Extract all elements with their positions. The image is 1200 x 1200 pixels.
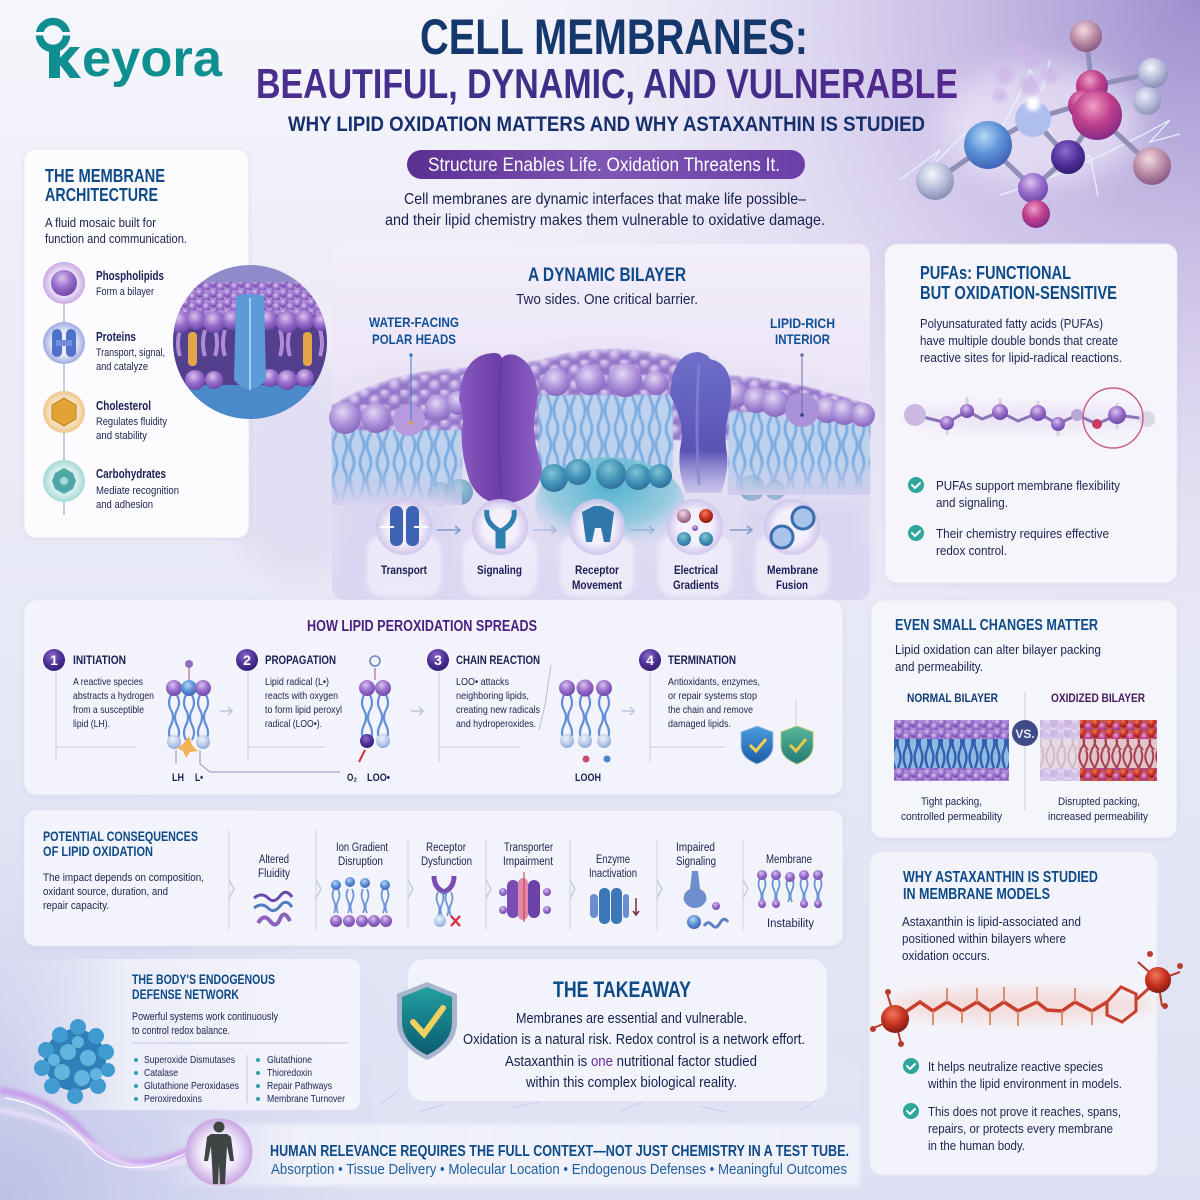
heading: consequences xyxy=(43,828,198,859)
icon: human figure in sphere xyxy=(186,1119,252,1185)
normal bilayer xyxy=(894,691,1009,823)
consequence: impaired signaling: Signaling xyxy=(676,856,716,868)
consequence: transporter impairment: Impairment xyxy=(503,856,554,868)
oxidized bilayer xyxy=(1040,691,1157,823)
description: The impact depends on composition, xyxy=(43,872,204,884)
inset: membrane close-up circle xyxy=(169,265,331,425)
description xyxy=(132,1011,278,1037)
description: repair capacity. xyxy=(43,900,109,912)
molecule illustration xyxy=(900,20,1180,228)
defense list: Thioredoxin xyxy=(267,1067,312,1079)
step 2: propagation xyxy=(236,649,342,730)
defense list: Catalase xyxy=(144,1067,178,1079)
defense list: Repair Pathways xyxy=(267,1080,332,1092)
defense list xyxy=(134,1054,345,1105)
takeaway text: Astaxanthin is one nutritional factor studied xyxy=(505,1053,757,1070)
step 4: termination: the chain and remove xyxy=(668,704,753,716)
defense list: Glutathione Peroxidases xyxy=(144,1080,239,1092)
defense list: Glutathione xyxy=(267,1054,312,1066)
function: receptor movement xyxy=(569,499,625,592)
callout: water-facing polar heads: POLAR HEADS xyxy=(372,331,456,347)
item: carbohydrates: Carbohydrates xyxy=(96,467,166,481)
heading: defense: THE BODY'S ENDOGENOUS xyxy=(132,971,275,987)
description xyxy=(902,914,1081,963)
consequence: impaired signaling xyxy=(676,842,728,929)
description: and permeability. xyxy=(895,659,983,674)
step 4: termination: TERMINATION xyxy=(668,653,736,667)
panel: endogenous defense network xyxy=(0,959,360,1110)
step 1: initiation: from a susceptible xyxy=(73,704,144,716)
VS badge: VS. xyxy=(1015,727,1035,741)
heading: membrane architecture xyxy=(45,166,165,205)
description: reactive sites for lipid-radical reactions. xyxy=(920,350,1122,365)
PUFA chain xyxy=(904,388,1155,448)
human relevance text xyxy=(270,1143,849,1178)
callout: water-facing polar heads: WATER-FACING xyxy=(369,314,459,330)
step 1: initiation xyxy=(43,649,154,730)
step 3: chain reaction xyxy=(427,649,540,730)
heading: membrane architecture: THE MEMBRANE xyxy=(45,166,165,186)
heading: PUFAs xyxy=(920,263,1117,303)
checklist: PUFAs support membrane flexibility xyxy=(936,478,1120,493)
step 3: chain reaction: and hydroperoxides. xyxy=(456,718,536,730)
checklist xyxy=(908,477,1120,558)
energy swirl xyxy=(0,1090,190,1168)
checklist: within the lipid environment in models. xyxy=(927,1076,1122,1091)
human relevance text: HUMAN RELEVANCE REQUIRES THE FULL CONTEXT—NOT JUST CHEMISTRY IN A TEST TUBE. xyxy=(270,1143,849,1160)
heading: defense xyxy=(132,971,275,1002)
function: transport: Transport xyxy=(381,563,427,577)
step 2: propagation: 2 xyxy=(243,652,251,668)
heading: takeaway: THE TAKEAWAY xyxy=(553,977,691,1002)
step 2: propagation: radical (LOO•). xyxy=(265,718,322,730)
item: carbohydrates: and adhesion xyxy=(96,499,153,511)
description xyxy=(43,872,204,912)
checklist: redox control. xyxy=(936,543,1007,558)
panel: membrane architecture xyxy=(24,149,249,538)
item: proteins: Proteins xyxy=(96,330,136,344)
human relevance text: Absorption • Tissue Delivery • Molecular Location • Endogenous Defenses • Meaningful Outcomes xyxy=(271,1161,847,1178)
function: electrical gradients: Gradients xyxy=(673,578,719,592)
heading: astaxanthin: IN MEMBRANE MODELS xyxy=(903,886,1050,903)
panel: how lipid peroxidation spreads xyxy=(24,600,843,795)
consequence: enzyme inactivation xyxy=(589,854,639,924)
membrane illustration xyxy=(329,336,875,590)
consequence: ion gradient disruption: Ion Gradient xyxy=(336,842,389,854)
heading: peroxidation: HOW LIPID PEROXIDATION SPREADS xyxy=(307,618,537,635)
flow arrows xyxy=(437,526,752,534)
arrow 2 xyxy=(411,707,423,715)
intro text: A fluid mosaic built for xyxy=(45,216,156,230)
description: to control redox balance. xyxy=(132,1025,230,1037)
consequence: enzyme inactivation: Inactivation xyxy=(589,868,637,880)
panel: potential consequences xyxy=(24,810,843,946)
icon: protein cluster xyxy=(34,1019,115,1104)
heading: membrane architecture: ARCHITECTURE xyxy=(45,185,158,205)
lipid diagram 3: LOOH xyxy=(575,772,601,784)
description: Lipid oxidation can alter bilayer packing xyxy=(895,642,1101,657)
function: signaling xyxy=(472,499,528,577)
logo: Keyora xyxy=(35,22,223,88)
consequence: receptor dysfunction: Receptor xyxy=(426,842,466,854)
item: proteins: Transport, signal, xyxy=(96,347,165,359)
step 1: initiation: A reactive species xyxy=(73,676,143,688)
item: carbohydrates: Mediate recognition xyxy=(96,485,179,497)
heading: PUFAs: BUT OXIDATION-SENSITIVE xyxy=(920,283,1117,303)
oxidized bilayer: Disrupted packing, xyxy=(1058,796,1140,808)
step 3: chain reaction: LOO• attacks xyxy=(456,676,509,688)
heading: defense: DEFENSE NETWORK xyxy=(132,986,239,1002)
normal bilayer: controlled permeability xyxy=(901,811,1002,823)
description: oxidant source, duration, and xyxy=(43,886,168,898)
checklist: and signaling. xyxy=(936,495,1008,510)
panel: the takeaway xyxy=(373,959,860,1118)
step 4: termination: damaged lipids. xyxy=(668,718,731,730)
defense list: Superoxide Dismutases xyxy=(144,1054,235,1066)
checklist: in the human body. xyxy=(928,1138,1025,1153)
step 3: chain reaction: creating new radicals xyxy=(456,704,540,716)
item: phospholipids xyxy=(43,262,164,304)
lipid diagram 1: LH xyxy=(172,772,184,784)
panel: why astaxanthin is studied xyxy=(870,852,1183,1175)
lipid diagram 3 xyxy=(539,665,612,784)
VS badge xyxy=(1012,720,1038,746)
heading: PUFAs: PUFAs: FUNCTIONAL xyxy=(920,263,1071,283)
description: oxidation occurs. xyxy=(902,948,990,963)
logo: Keyora: eyora xyxy=(82,30,223,88)
step 2: propagation: to form lipid peroxyl xyxy=(265,704,342,716)
function: transport xyxy=(376,499,432,577)
step 1: initiation: lipid (LH). xyxy=(73,718,110,730)
description xyxy=(895,642,1101,674)
intro text xyxy=(45,216,187,246)
consequence: ion gradient disruption: Disruption xyxy=(338,856,383,868)
consequence: altered fluidity: Fluidity xyxy=(258,868,290,880)
defense list: Peroxiredoxins xyxy=(144,1093,202,1105)
bottom band: human relevance xyxy=(0,1090,860,1186)
intro text: Cell membranes are dynamic interfaces that make life possible– xyxy=(404,191,806,208)
consequence: receptor dysfunction xyxy=(421,842,472,927)
item: cholesterol: Regulates fluidity xyxy=(96,416,167,428)
checklist xyxy=(903,1058,1122,1153)
step 1: initiation: 1 xyxy=(50,652,58,668)
consequence: membrane instability xyxy=(757,854,823,930)
callout: lipid-rich interior: LIPID-RICH xyxy=(770,315,835,331)
function: electrical gradients: Electrical xyxy=(674,563,718,577)
consequence: transporter impairment xyxy=(499,842,554,922)
lipid diagram 1 xyxy=(166,660,340,784)
astaxanthin molecule xyxy=(870,951,1183,1047)
lipid diagram 2: O₂ xyxy=(347,772,357,784)
oxidized bilayer: increased permeability xyxy=(1048,811,1148,823)
intro text: function and communication. xyxy=(45,232,187,246)
checklist: repairs, or protects every membrane xyxy=(928,1121,1113,1136)
callout: lipid-rich interior xyxy=(770,315,835,417)
description: Polyunsaturated fatty acids (PUFAs) xyxy=(920,316,1103,331)
heading: consequences: OF LIPID OXIDATION xyxy=(43,843,153,859)
normal bilayer: Tight packing, xyxy=(921,796,982,808)
title block: WHY LIPID OXIDATION MATTERS AND WHY ASTAXANTHIN IS STUDIED xyxy=(288,113,925,136)
pedestals xyxy=(367,535,829,597)
lipid diagram 1: L• xyxy=(195,772,203,784)
lipid diagram 2 xyxy=(347,656,391,784)
consequence: altered fluidity: Altered xyxy=(259,854,289,866)
takeaway text: Membranes are essential and vulnerable. xyxy=(516,1010,747,1027)
step 1: initiation: abstracts a hydrogen xyxy=(73,690,154,702)
heading: small changes: EVEN SMALL CHANGES MATTER xyxy=(895,617,1098,634)
function: membrane fusion: Fusion xyxy=(776,578,808,592)
arrow 3 xyxy=(622,707,634,715)
panel: a dynamic bilayer xyxy=(329,244,875,600)
membrane protein: blue xyxy=(670,352,731,493)
icon: shields xyxy=(741,726,813,764)
step 3: chain reaction: CHAIN REACTION xyxy=(456,653,540,667)
description xyxy=(920,316,1122,365)
membrane protein: purple xyxy=(459,353,542,504)
intro text xyxy=(385,191,825,229)
step 3: chain reaction: 3 xyxy=(434,652,442,668)
function: signaling: Signaling xyxy=(477,563,522,577)
item: phospholipids: Form a bilayer xyxy=(96,286,154,298)
function: receptor movement: Movement xyxy=(572,578,622,592)
step 2: propagation: Lipid radical (L•) xyxy=(265,676,329,688)
item: carbohydrates xyxy=(43,460,179,511)
title block xyxy=(256,9,958,136)
heading: a dynamic bilayer xyxy=(516,265,698,308)
step 4: termination: 4 xyxy=(646,652,654,668)
takeaway text: Oxidation is a natural risk. Redox control is a network effort. xyxy=(463,1031,805,1048)
step 4: termination: Antioxidants, enzymes, xyxy=(668,676,760,688)
description: Powerful systems work continuously xyxy=(132,1011,278,1023)
step 4: termination xyxy=(639,649,760,730)
tagline pill: Structure Enables Life. Oxidation Threatens It. xyxy=(428,155,780,176)
lipid diagram 2: LOO• xyxy=(367,772,390,784)
consequence: enzyme inactivation: Enzyme xyxy=(596,854,630,866)
checklist: Their chemistry requires effective xyxy=(936,526,1109,541)
step 1: initiation: INITIATION xyxy=(73,653,126,667)
heading: a dynamic bilayer: A DYNAMIC BILAYER xyxy=(528,265,686,286)
consequence: receptor dysfunction: Dysfunction xyxy=(421,856,472,868)
item: cholesterol: Cholesterol xyxy=(96,399,151,413)
step 4: termination: or repair systems stop xyxy=(668,690,757,702)
panel: even small changes matter xyxy=(871,600,1177,838)
heading: astaxanthin: WHY ASTAXANTHIN IS STUDIED xyxy=(903,869,1098,886)
function: electrical gradients xyxy=(667,499,723,592)
title block: CELL MEMBRANES: xyxy=(420,9,808,65)
checklist: This does not prove it reaches, spans, xyxy=(928,1104,1121,1119)
consequence: altered fluidity xyxy=(254,854,292,925)
heading: astaxanthin xyxy=(903,869,1098,903)
function: membrane fusion: Membrane xyxy=(767,563,818,577)
consequence: membrane instability: Membrane xyxy=(766,854,812,866)
callout: lipid-rich interior: INTERIOR xyxy=(775,331,830,347)
intro text: and their lipid chemistry makes them vulnerable to oxidative damage. xyxy=(385,212,825,229)
checklist: It helps neutralize reactive species xyxy=(928,1059,1103,1074)
consequence: transporter impairment: Transporter xyxy=(504,842,553,854)
function: membrane fusion xyxy=(764,499,820,592)
defense list: Membrane Turnover xyxy=(267,1093,345,1105)
heading: a dynamic bilayer: Two sides. One critical barrier. xyxy=(516,291,698,308)
arrow 1 xyxy=(220,707,232,715)
normal bilayer: NORMAL BILAYER xyxy=(907,691,998,705)
description: have multiple double bonds that create xyxy=(920,333,1118,348)
takeaway text xyxy=(463,1010,805,1091)
callout: water-facing polar heads xyxy=(369,314,459,425)
icon: shield xyxy=(397,982,457,1060)
tagline pill xyxy=(407,150,805,179)
consequence: impaired signaling: Impaired xyxy=(676,842,715,854)
item: cholesterol: and stability xyxy=(96,430,147,442)
description: positioned within bilayers where xyxy=(902,931,1066,946)
takeaway text: within this complex biological reality. xyxy=(525,1074,737,1091)
item: proteins xyxy=(43,322,165,373)
consequence: membrane instability: Instability xyxy=(767,918,814,930)
title block: BEAUTIFUL, DYNAMIC, AND VULNERABLE xyxy=(256,60,958,107)
item: cholesterol xyxy=(43,391,167,442)
step 2: propagation: PROPAGATION xyxy=(265,653,336,667)
item: proteins: and catalyze xyxy=(96,361,148,373)
description: Astaxanthin is lipid-associated and xyxy=(902,914,1081,929)
item: phospholipids: Phospholipids xyxy=(96,269,164,283)
heading: consequences: POTENTIAL CONSEQUENCES xyxy=(43,828,198,844)
oxidized bilayer: OXIDIZED BILAYER xyxy=(1051,691,1145,705)
panel: PUFAs xyxy=(885,244,1177,583)
function: receptor movement: Receptor xyxy=(575,563,619,577)
step 2: propagation: reacts with oxygen xyxy=(265,690,338,702)
consequence: ion gradient disruption xyxy=(330,842,392,927)
step 3: chain reaction: neighboring lipids, xyxy=(456,690,529,702)
